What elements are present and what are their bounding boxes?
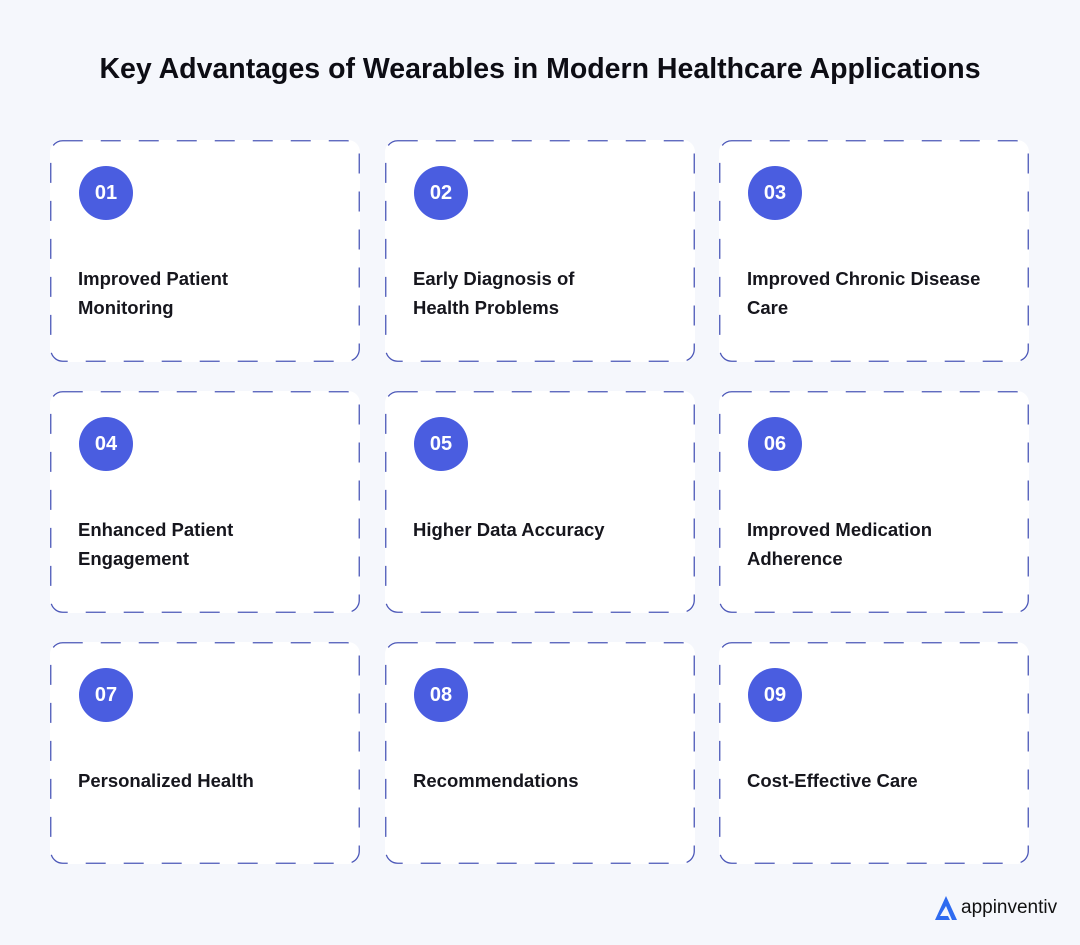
text 01: Monitoring	[78, 297, 174, 318]
card 07	[50, 642, 360, 864]
card 04	[50, 391, 360, 613]
icon: logo mark	[935, 896, 957, 920]
text 04: Engagement	[78, 548, 189, 569]
number 05: 05	[430, 433, 452, 455]
text 09: Cost-Effective Care	[747, 770, 918, 791]
card 02	[385, 140, 695, 362]
text 02: Early Diagnosis of	[413, 268, 574, 289]
number 05	[414, 417, 468, 471]
text 06: Adherence	[747, 548, 843, 569]
card 05	[385, 391, 695, 613]
text 03	[747, 268, 980, 318]
card 08	[385, 642, 695, 864]
number 02	[414, 166, 468, 220]
text 01: Improved Patient	[78, 268, 228, 289]
number 04	[79, 417, 133, 471]
number 08	[414, 668, 468, 722]
number 09	[748, 668, 802, 722]
text 08: Recommendations	[413, 770, 579, 791]
number 08: 08	[430, 684, 452, 706]
text 03: Care	[747, 297, 788, 318]
number 09: 09	[764, 684, 786, 706]
text 06	[747, 519, 932, 569]
number 01	[79, 166, 133, 220]
text 07: Personalized Health	[78, 770, 254, 791]
text 02	[413, 268, 574, 318]
card 06	[719, 391, 1029, 613]
card 01	[50, 140, 360, 362]
text 03: Improved Chronic Disease	[747, 268, 980, 289]
number 03: 03	[764, 182, 786, 204]
text 05: Higher Data Accuracy	[413, 519, 605, 540]
card 09	[719, 642, 1029, 864]
number 06: 06	[764, 433, 786, 455]
number 01: 01	[95, 182, 117, 204]
text 02: Health Problems	[413, 297, 559, 318]
number 06	[748, 417, 802, 471]
number 07	[79, 668, 133, 722]
text 04: Enhanced Patient	[78, 519, 233, 540]
text 04	[78, 519, 234, 569]
number 02: 02	[430, 182, 452, 204]
card 03	[719, 140, 1029, 362]
number 04: 04	[95, 433, 117, 455]
logo text: appinventiv	[961, 897, 1057, 918]
logo: appinventiv	[935, 896, 1057, 920]
number 03	[748, 166, 802, 220]
title: Key Advantages of Wearables in Modern Healthcare Applications	[99, 53, 981, 85]
text 01	[78, 268, 228, 318]
text 06: Improved Medication	[747, 519, 932, 540]
number 07: 07	[95, 684, 117, 706]
